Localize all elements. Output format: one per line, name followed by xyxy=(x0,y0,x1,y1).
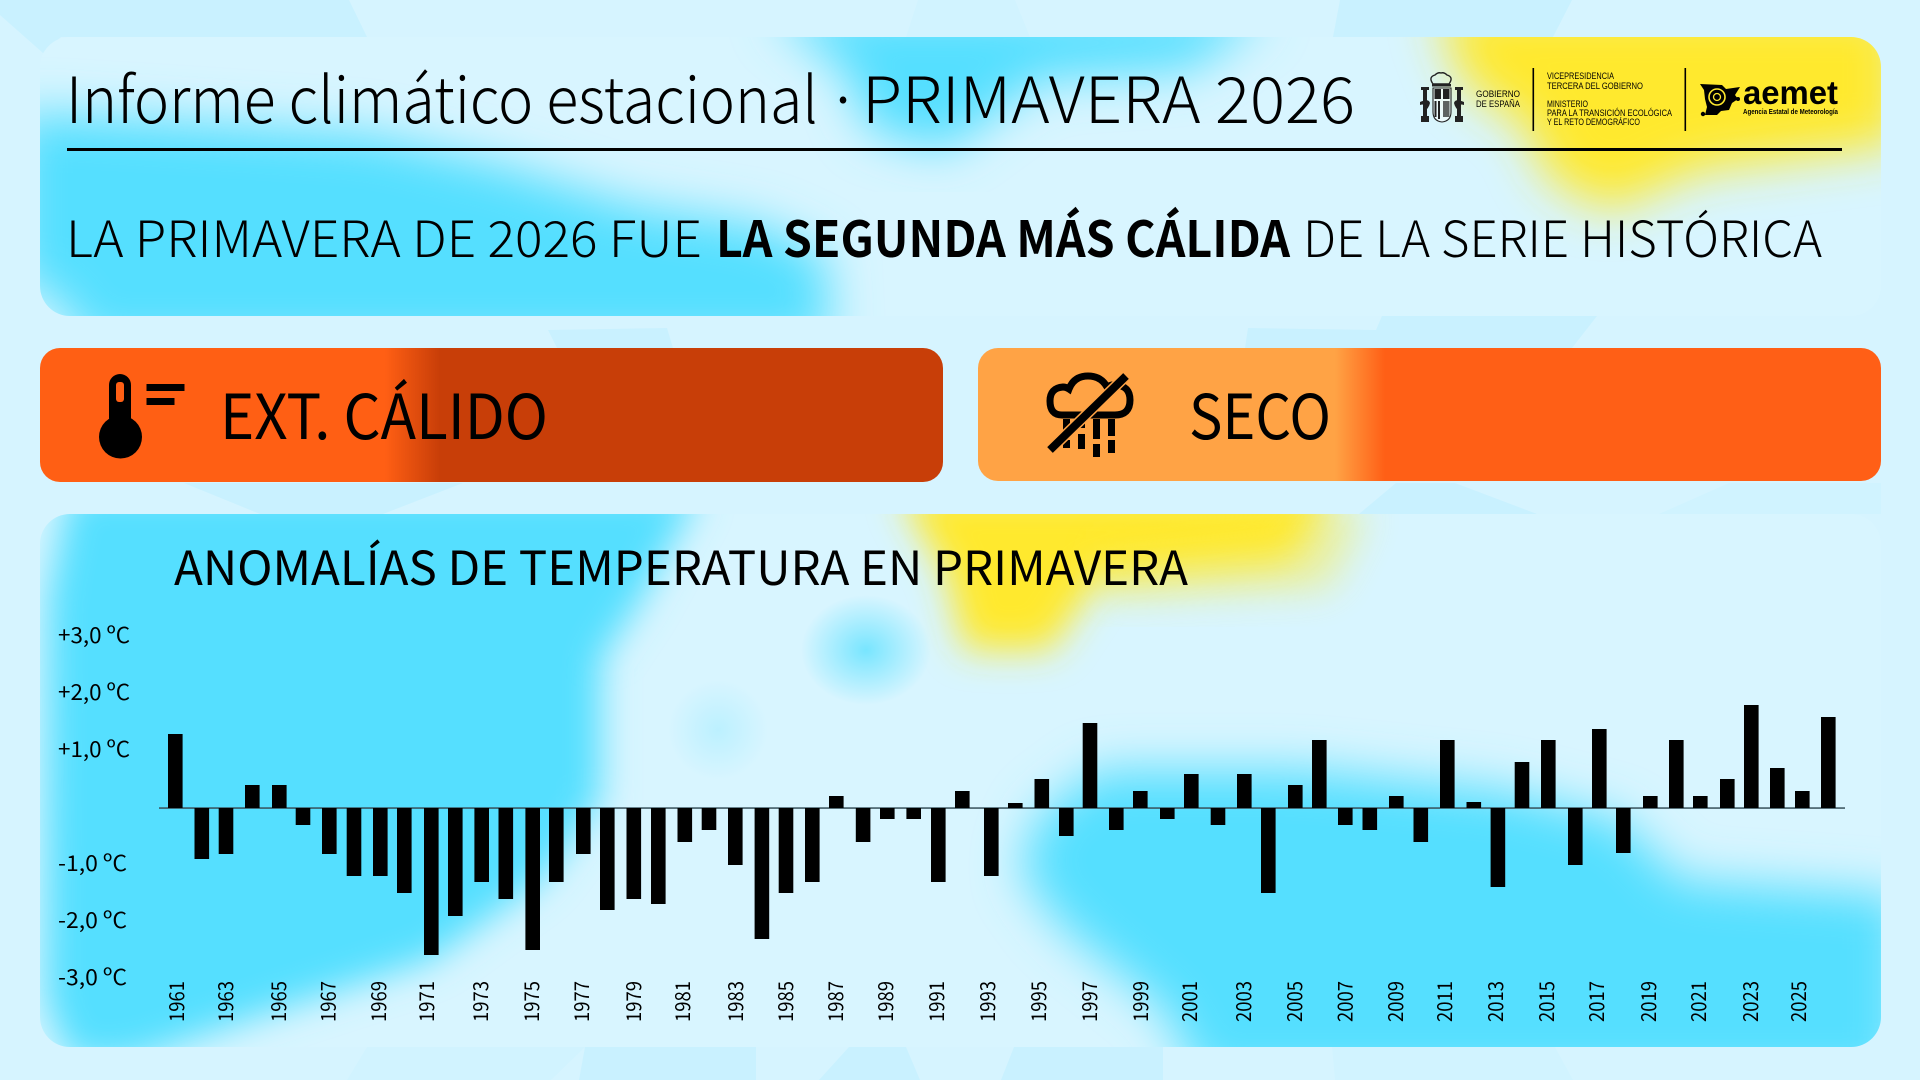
panel: precipitation status xyxy=(978,348,1881,481)
x axis year labels xyxy=(161,981,1812,1022)
text: aemet: aemet xyxy=(1743,74,1838,111)
x axis year labels: 1983 xyxy=(720,981,749,1022)
title: PRIMAVERA 2026 xyxy=(862,50,1355,142)
x axis year labels: 1981 xyxy=(667,981,696,1022)
x axis year labels: 2017 xyxy=(1581,981,1610,1022)
panel: temperature status xyxy=(40,348,943,482)
y axis labels: +3,0 ºC xyxy=(58,618,130,650)
icon: aemet map xyxy=(1700,84,1740,116)
title xyxy=(66,50,1355,142)
bar chart: anomalies 1961-2026 xyxy=(168,705,1836,955)
x axis year labels: 1991 xyxy=(921,981,950,1022)
x axis year labels: 1993 xyxy=(972,981,1001,1022)
x axis year labels: 2013 xyxy=(1480,981,1509,1022)
title: · xyxy=(826,50,861,142)
x axis year labels: 1973 xyxy=(465,981,494,1022)
text: ministry: MINISTERIO xyxy=(1547,99,1588,109)
text: ministry: Y EL RETO DEMOGRÁFICO xyxy=(1547,117,1640,127)
headline xyxy=(66,200,1822,272)
x axis year labels: 2007 xyxy=(1330,981,1359,1022)
text: Gobierno de España xyxy=(1476,89,1521,110)
x axis year labels: 2001 xyxy=(1174,981,1203,1022)
text: Gobierno de España: DE ESPAÑA xyxy=(1476,99,1521,110)
y axis labels: +1,0 ºC xyxy=(58,732,130,764)
icon: thermometer xyxy=(99,374,184,458)
text: agency name: Agencia Estatal de Meteorología xyxy=(1743,107,1839,116)
text: ministry: VICEPRESIDENCIA xyxy=(1547,71,1614,81)
x axis year labels: 2009 xyxy=(1380,981,1409,1022)
y axis labels: -2,0 ºC xyxy=(58,903,127,935)
y axis labels xyxy=(58,618,130,992)
icon: rain cloud struck through xyxy=(1050,376,1130,457)
y axis labels: +2,0 ºC xyxy=(58,675,130,707)
zero axis line xyxy=(159,807,1845,809)
headline: DE LA SERIE HISTÓRICA xyxy=(1303,200,1822,272)
headline: LA SEGUNDA MÁS CÁLIDA xyxy=(716,200,1291,272)
logos: government and aemet xyxy=(1420,68,1839,131)
x axis year labels: 2019 xyxy=(1633,981,1662,1022)
x axis year labels: 1987 xyxy=(820,981,849,1022)
x axis year labels: 1995 xyxy=(1023,981,1052,1022)
title rule xyxy=(67,148,1842,151)
x axis year labels: 2005 xyxy=(1279,981,1308,1022)
y axis labels: -1,0 ºC xyxy=(58,846,127,878)
x axis year labels: 1997 xyxy=(1074,981,1103,1022)
text: ministry: PARA LA TRANSICIÓN ECOLÓGICA xyxy=(1547,108,1672,118)
icon: coat of arms of Spain xyxy=(1420,73,1464,122)
x axis year labels: 1985 xyxy=(770,981,799,1022)
x axis year labels: 1975 xyxy=(516,981,545,1022)
text: Gobierno de España: GOBIERNO xyxy=(1476,89,1520,100)
x axis year labels: 1965 xyxy=(263,981,292,1022)
x axis year labels: 1967 xyxy=(313,981,342,1022)
x axis year labels: 2011 xyxy=(1429,981,1458,1022)
panel: chart xyxy=(40,514,1881,1047)
title: Informe climático estacional xyxy=(66,50,818,142)
x axis year labels: 1971 xyxy=(411,981,440,1022)
x axis year labels: 2021 xyxy=(1683,981,1712,1022)
panel: header xyxy=(40,37,1881,316)
x axis year labels: 2025 xyxy=(1783,981,1812,1022)
x axis year labels: 2015 xyxy=(1531,981,1560,1022)
label: SECO: SECO xyxy=(1189,367,1331,457)
x axis year labels: 1979 xyxy=(618,981,647,1022)
x axis year labels: 1963 xyxy=(210,981,239,1022)
x axis year labels: 2023 xyxy=(1735,981,1764,1022)
headline: LA PRIMAVERA DE 2026 FUE xyxy=(66,200,702,272)
text: ministry: TERCERA DEL GOBIERNO xyxy=(1547,81,1643,91)
label: EXT. CÁLIDO: EXT. CÁLIDO xyxy=(220,367,548,457)
y axis labels: -3,0 ºC xyxy=(58,960,127,992)
x axis year labels: 1989 xyxy=(870,981,899,1022)
chart title: ANOMALÍAS DE TEMPERATURA EN PRIMAVERA xyxy=(174,530,1188,599)
x axis year labels: 1969 xyxy=(363,981,392,1022)
x axis year labels: 1961 xyxy=(161,981,190,1022)
text: ministry xyxy=(1547,71,1672,127)
x axis year labels: 1999 xyxy=(1125,981,1154,1022)
x axis year labels: 2003 xyxy=(1228,981,1257,1022)
x axis year labels: 1977 xyxy=(566,981,595,1022)
